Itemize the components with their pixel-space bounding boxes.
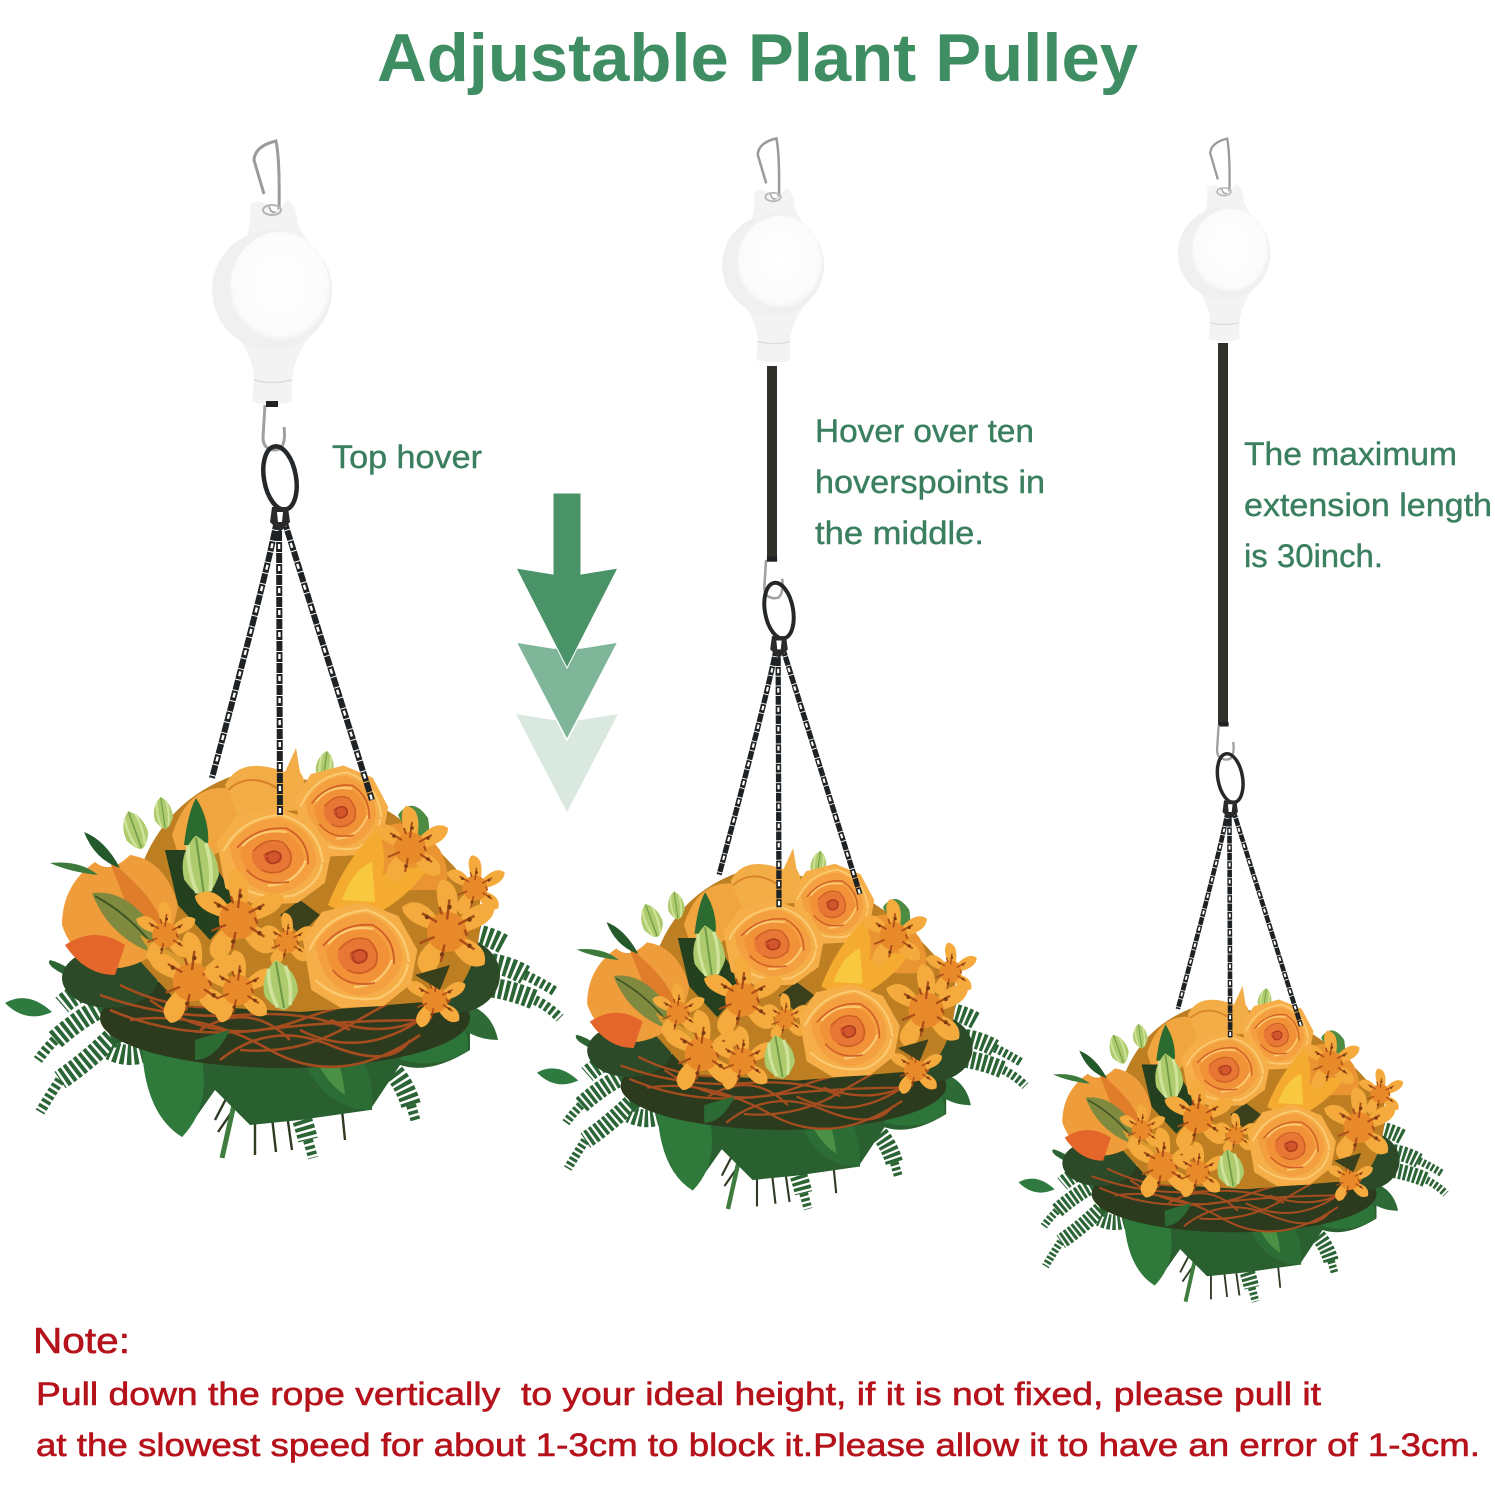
hanging basket: top hover [5, 141, 560, 1158]
note [33, 1320, 1480, 1463]
flower basket 1 [5, 444, 560, 1158]
pulley 2 [722, 138, 824, 362]
pulley 3 [1178, 139, 1270, 341]
label: maximum extension: extension length [1244, 487, 1492, 523]
label: maximum extension [1244, 436, 1492, 574]
hook 1 [263, 401, 284, 450]
hook 3 [1217, 722, 1234, 760]
hanging basket: middle [537, 138, 1025, 1209]
cord 2 [767, 366, 777, 560]
label: maximum extension: The maximum [1244, 436, 1457, 472]
cord 3 [1218, 343, 1228, 725]
flower basket 2 [537, 580, 1025, 1209]
note line 2: at the slowest speed for about 1-3cm to block it.Please allow it to have an error of 1-3cm. [36, 1427, 1480, 1463]
label: middle hover: hoverspoints in [815, 464, 1045, 500]
title: Adjustable Plant Pulley [377, 20, 1138, 96]
label: maximum extension: is 30inch. [1244, 538, 1383, 574]
note line 1: Pull down the rope vertically to your ideal height, if it is not fixed, please pull it [36, 1376, 1321, 1412]
label: middle hover: Hover over ten [815, 413, 1034, 449]
note heading: Note: [33, 1320, 130, 1361]
label: top hover: Top hover [332, 439, 482, 475]
hanging basket: maximum extension [1018, 139, 1446, 1302]
flower basket 3 [1018, 752, 1446, 1302]
arrows: downward direction [516, 493, 618, 812]
label: middle hover: the middle. [815, 515, 984, 551]
pulley 1 [212, 141, 332, 404]
label: middle hover [815, 413, 1045, 551]
hook 2 [764, 557, 783, 598]
